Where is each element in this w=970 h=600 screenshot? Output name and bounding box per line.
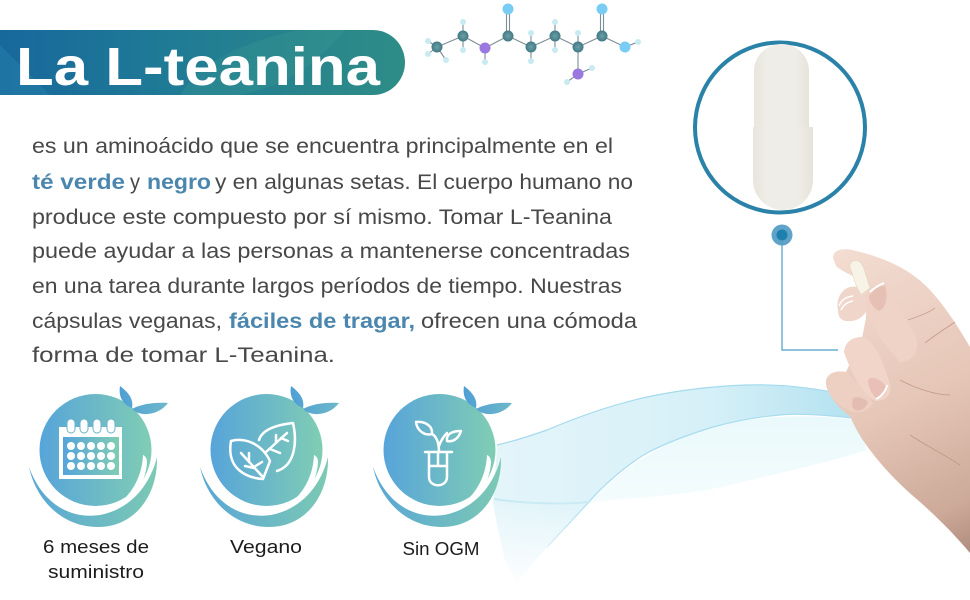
description paragraph: en una tarea durante largos períodos de tiempo. Nuestras xyxy=(32,275,622,298)
thumb nail tip xyxy=(870,283,884,292)
little fingernail xyxy=(852,397,868,411)
description paragraph: negro xyxy=(147,171,211,194)
badge labels: 6 meses de xyxy=(43,537,149,557)
description paragraph: y en algunas setas. El cuerpo humano no xyxy=(215,171,633,194)
hand holding capsule xyxy=(826,249,970,553)
icon: plant in test tube xyxy=(416,422,461,485)
palm creases xyxy=(900,308,960,465)
description paragraph: fáciles de tragar, xyxy=(229,310,415,333)
badge labels xyxy=(43,537,480,582)
badge labels: Sin OGM xyxy=(402,539,480,559)
thumb nail xyxy=(869,286,887,311)
ring nail xyxy=(868,378,886,399)
enlarged capsule xyxy=(753,44,813,210)
description paragraph: y xyxy=(130,171,140,194)
leaves xyxy=(120,386,168,414)
swoosh xyxy=(373,457,501,527)
capsule zoom circle xyxy=(695,42,865,212)
badge: non-GMO xyxy=(373,386,512,527)
description paragraph: puede ayudar a las personas a mantenerse concentradas xyxy=(32,240,630,263)
middle fingernail xyxy=(839,296,853,310)
hand body xyxy=(826,249,970,553)
ring nail tip xyxy=(876,385,887,399)
badge labels: suministro xyxy=(48,562,144,582)
description paragraph: té verde xyxy=(32,171,125,194)
badge labels: Vegano xyxy=(230,537,302,557)
badge: vegan xyxy=(200,386,339,527)
description paragraph: cápsulas veganas, xyxy=(32,310,222,333)
middle finger xyxy=(837,287,866,321)
molecule diagram xyxy=(425,4,641,85)
title text: La L-teanina xyxy=(16,37,381,97)
icon: two leaves xyxy=(230,423,295,479)
thumb xyxy=(865,283,917,362)
description paragraph: produce este compuesto por sí mismo. Tomar L-Teanina xyxy=(32,206,612,229)
little finger xyxy=(826,372,873,412)
leaves xyxy=(291,386,339,414)
crescent xyxy=(112,455,147,507)
description paragraph xyxy=(32,135,637,367)
capsule in fingers xyxy=(850,261,870,295)
swoosh xyxy=(29,457,157,527)
description paragraph: ofrecen una cómoda xyxy=(421,310,637,333)
description paragraph: es un aminoácido que se encuentra principalmente en el xyxy=(32,135,613,158)
swoosh xyxy=(200,457,328,527)
flowing ribbon xyxy=(488,385,867,590)
crescent xyxy=(456,455,491,507)
leaves xyxy=(464,386,512,414)
disc xyxy=(210,394,322,506)
connector line xyxy=(782,240,838,350)
badge: supply xyxy=(29,386,168,527)
disc xyxy=(384,394,496,506)
disc xyxy=(40,394,152,506)
description paragraph: forma de tomar L-Teanina. xyxy=(32,344,335,367)
icon: calendar xyxy=(59,419,122,479)
crescent xyxy=(283,455,318,507)
ring finger xyxy=(844,337,890,401)
pointer dot xyxy=(772,224,792,246)
title banner xyxy=(0,30,405,97)
